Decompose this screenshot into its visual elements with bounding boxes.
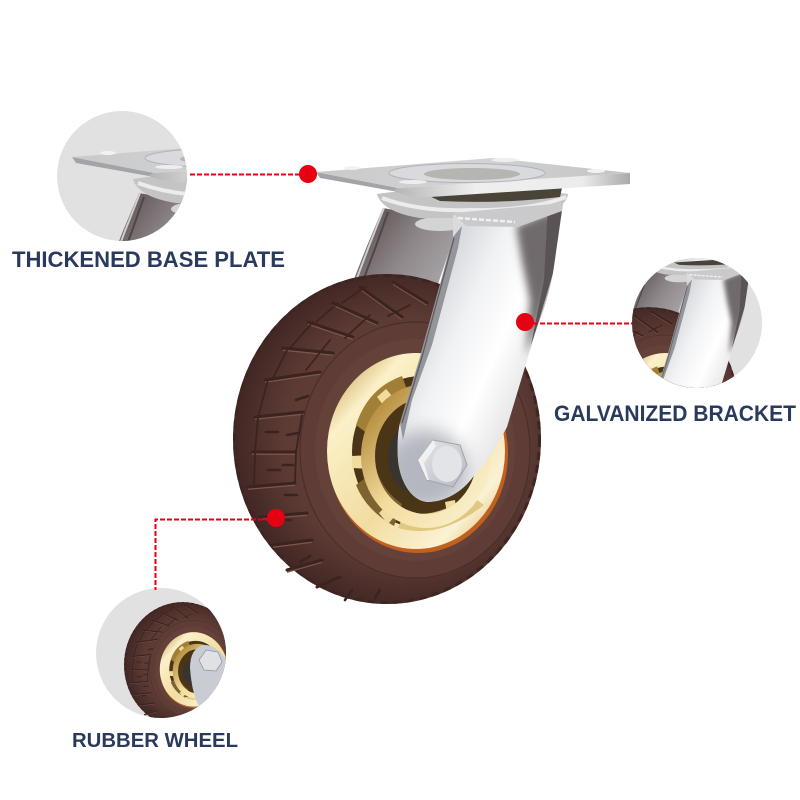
dashed leader line: [156, 520, 270, 590]
inner gold ring: [368, 391, 484, 521]
label: GALVANIZED BRACKET: [554, 401, 797, 426]
callout: thickened base plate: [12, 111, 317, 267]
rear bracket arm: [354, 208, 465, 284]
red marker dot: [516, 313, 534, 331]
bracket shading: [383, 203, 566, 510]
callout: rubber wheel: [72, 509, 285, 752]
top mounting plate: [316, 158, 630, 198]
tire: [233, 274, 541, 604]
dashed leader line: [533, 322, 632, 324]
weld: [453, 203, 563, 227]
detail circle: base plate: [57, 111, 187, 241]
hub interior: [352, 376, 490, 528]
sidewall: [300, 322, 530, 578]
dashed leader line: [190, 174, 300, 176]
left fold: [400, 226, 462, 440]
tread pattern: [248, 282, 427, 600]
orange rim line: [328, 355, 508, 553]
front galvanized bracket: [383, 203, 566, 510]
gold rim: [327, 353, 505, 549]
detail circle: bracket: [632, 258, 762, 388]
spokes: [352, 389, 457, 524]
axle: [388, 424, 436, 492]
red marker dot: [267, 509, 285, 527]
red marker dot: [299, 165, 317, 183]
hex bolt: [418, 440, 467, 487]
callout: galvanized bracket: [516, 258, 796, 421]
label: THICKENED BASE PLATE: [12, 247, 285, 272]
detail circle: wheel: [96, 588, 226, 718]
label: RUBBER WHEEL: [72, 730, 238, 752]
swivel ring: [377, 187, 568, 218]
tread highlights: [248, 284, 427, 572]
main product: swivel caster: [233, 158, 630, 604]
wheel: [233, 274, 541, 604]
